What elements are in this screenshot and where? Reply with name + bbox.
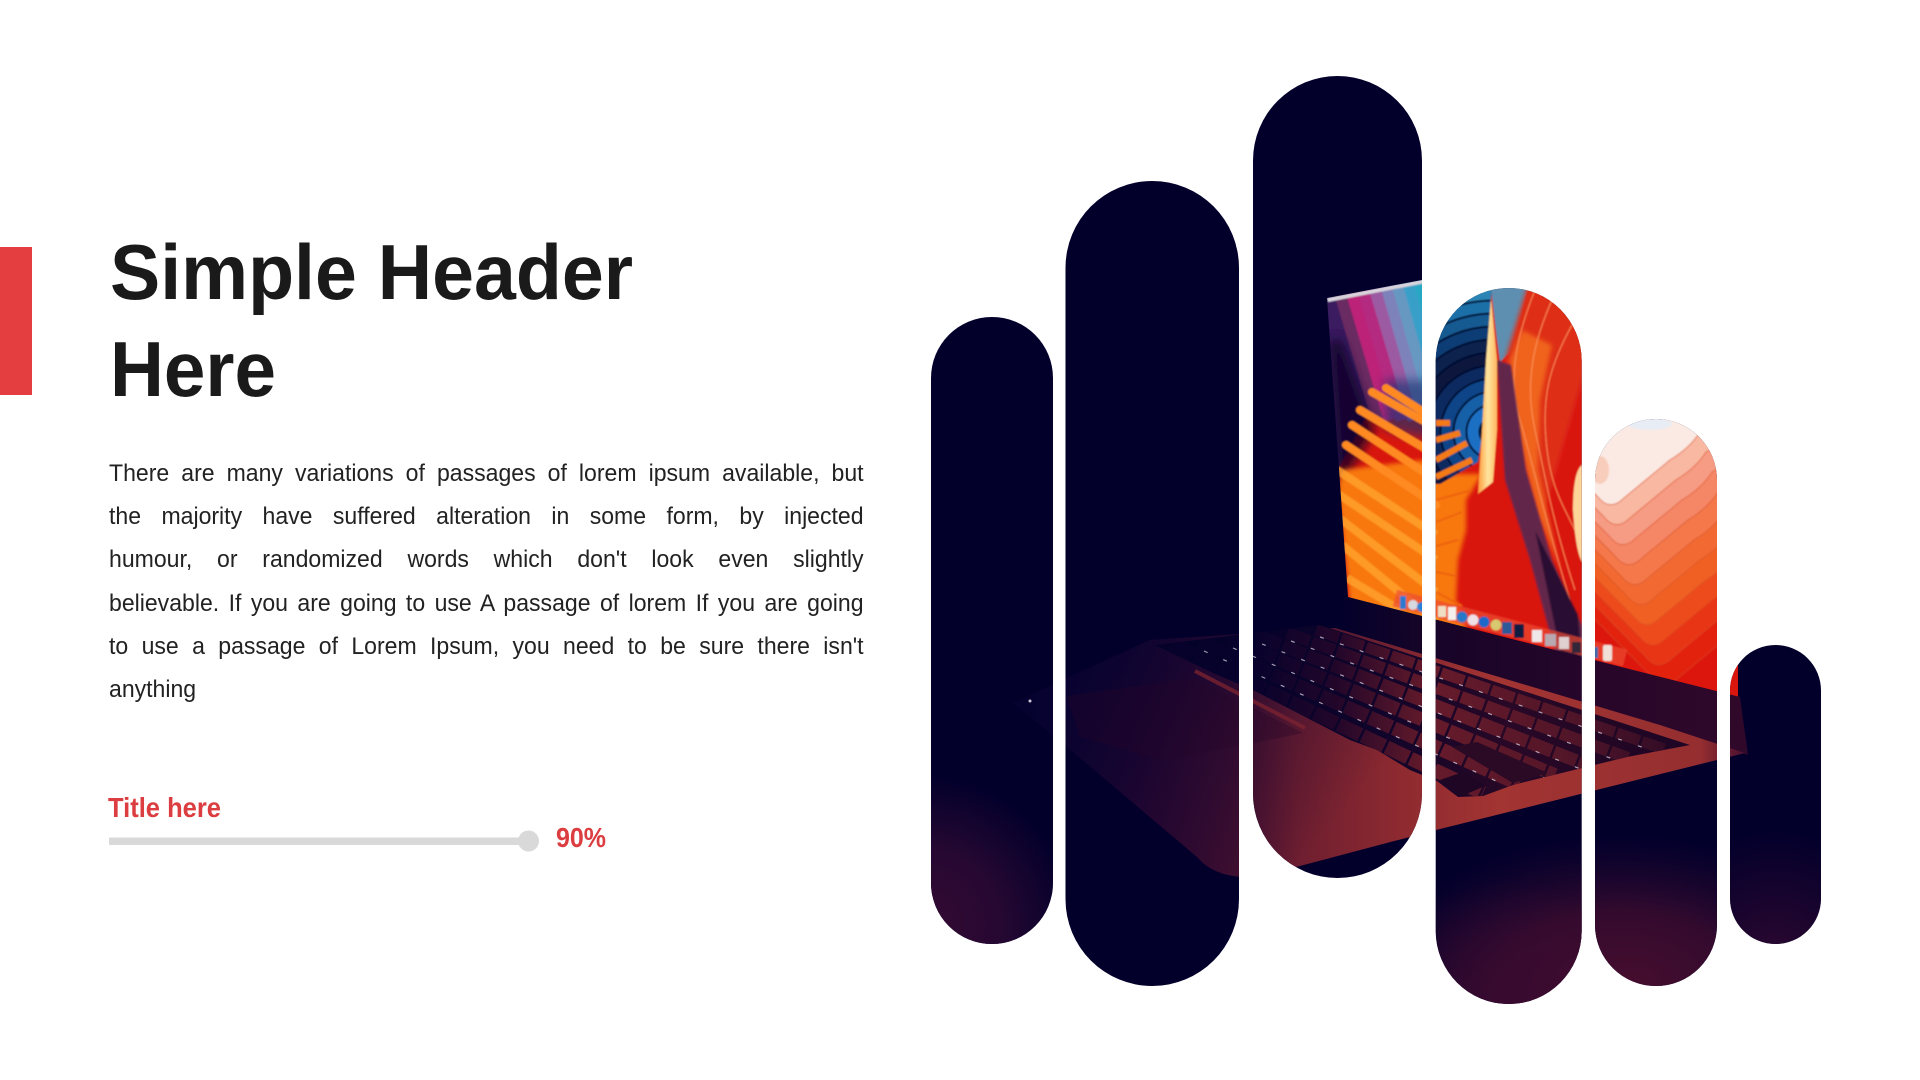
progress track	[109, 838, 529, 845]
title: Here	[110, 325, 276, 413]
key glints	[1204, 636, 1642, 782]
wallpaper: orange feathers	[1337, 388, 1482, 640]
wallpaper: flames	[1505, 285, 1590, 600]
progress knob	[518, 830, 539, 852]
body paragraph: the majority have suffered alteration in some form, by injected	[109, 503, 864, 530]
progress value: 90%	[556, 822, 606, 853]
body paragraph: to use a passage of Lorem Ipsum, you need to be sure there isn't	[109, 633, 864, 660]
body paragraph: There are many variations of passages of lorem ipsum available, but	[109, 460, 864, 487]
stray speck	[1028, 700, 1032, 702]
trackpad edge	[1195, 671, 1305, 728]
accent bar	[0, 247, 32, 395]
progress label: Title here	[108, 792, 221, 823]
wallpaper: blue grey stripes	[1490, 288, 1528, 362]
pill outline 2	[1066, 181, 1239, 986]
table glow	[931, 792, 1821, 1004]
deck shading	[1014, 628, 1438, 872]
photo background	[900, 60, 1850, 1020]
dock	[1395, 596, 1625, 661]
key rows	[1254, 625, 1666, 796]
keyboard well	[1150, 620, 1695, 800]
pill outline 3	[1253, 76, 1422, 878]
laptop bezel	[1372, 604, 1748, 755]
image panel: laptop photo clipped into six pills	[931, 76, 1821, 1004]
laptop deck	[1013, 628, 1745, 877]
wallpaper: purple ridge	[1497, 360, 1585, 660]
keyboard	[1150, 620, 1695, 800]
pill outline 1	[931, 317, 1053, 944]
progress item: title here 90%	[108, 792, 606, 853]
pill outline 5	[1595, 419, 1717, 986]
space bar	[1452, 742, 1548, 783]
title	[110, 228, 633, 413]
trackpad	[1066, 693, 1302, 742]
laptop screen	[1327, 280, 1738, 696]
wallpaper: blue swirl	[1436, 290, 1493, 485]
body paragraph	[109, 460, 864, 703]
body paragraph: humour, or randomized words which don't look even slightly	[109, 546, 864, 573]
wallpaper: fan stripes	[1327, 280, 1422, 486]
wallpaper: pill four feathers	[1436, 423, 1472, 477]
pill outline 6	[1730, 645, 1821, 944]
wallpaper: layered waves	[1595, 419, 1717, 681]
body paragraph: believable. If you are going to use A passage of lorem If you are going	[109, 590, 864, 617]
body paragraph: anything	[109, 676, 196, 703]
arrow key	[1440, 774, 1483, 794]
menu bar	[1327, 280, 1422, 304]
wallpaper: cream bump	[1573, 465, 1582, 562]
pill outline 4	[1436, 288, 1582, 1004]
screen base	[1339, 290, 1738, 696]
wallpaper: yellow spire	[1478, 298, 1497, 494]
title: Simple Header	[110, 228, 633, 316]
